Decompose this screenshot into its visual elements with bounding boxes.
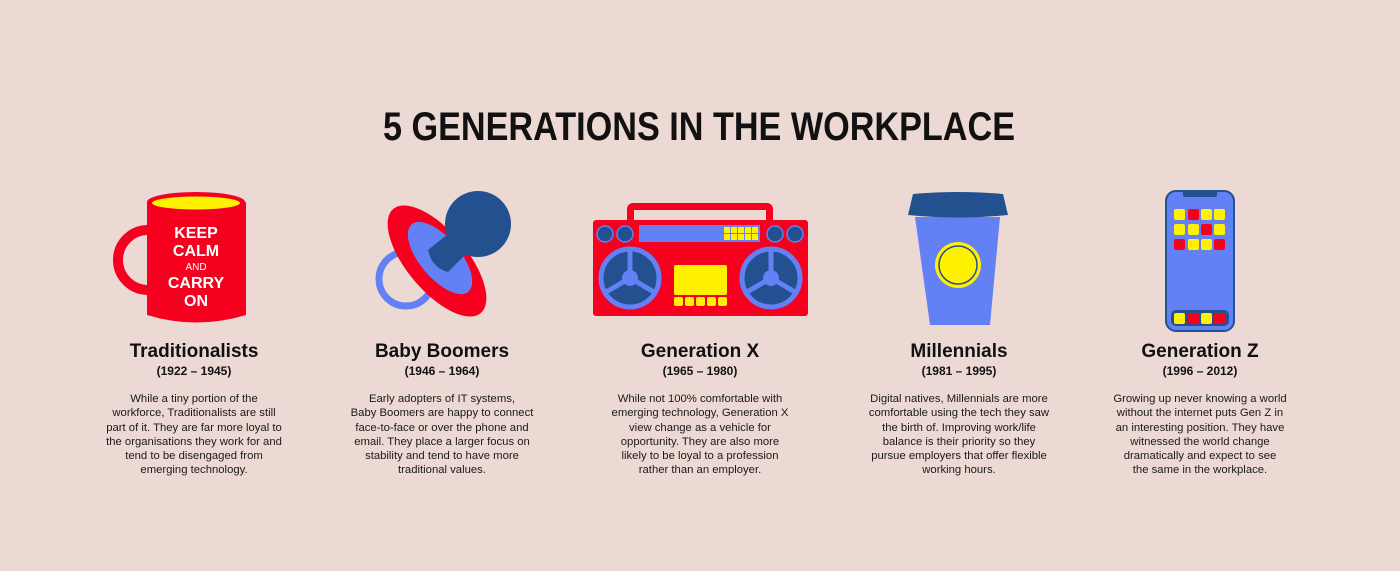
title: 5 GENERATIONS IN THE WORKPLACE (383, 105, 1015, 149)
text: generation z: (1996 – 2012) (1163, 364, 1237, 378)
text: baby boomers: face-to-face or over the phone and (355, 422, 529, 434)
icon: mug: KEEP (174, 225, 218, 242)
text: millennials: pursue employers that offer flexible (871, 450, 1047, 462)
text: generation z: Generation Z (1141, 341, 1259, 362)
text: generation x (612, 341, 788, 476)
text: generation z: witnessed the world change (1130, 436, 1270, 448)
text: baby boomers: stability and tend to have more (365, 450, 519, 462)
text: generation x: rather than an employer. (639, 464, 761, 476)
text: generation x: likely to be loyal to a profession (622, 450, 778, 462)
text: millennials: working hours. (922, 464, 996, 476)
text: traditionalists: (1922 – 1945) (157, 364, 231, 378)
text: generation x: (1965 – 1980) (663, 364, 737, 378)
text: generation x: emerging technology, Generation X (612, 407, 788, 419)
text: generation z (1113, 341, 1287, 476)
text: traditionalists: Traditionalists (130, 341, 258, 362)
text: generation z: without the internet puts Gen Z in (1117, 407, 1283, 419)
icon: mug: ON (184, 293, 208, 310)
text: millennials (869, 341, 1049, 476)
icon: mug: CALM (173, 243, 219, 260)
text: millennials: the birth of. Improving work/life (882, 422, 1036, 434)
text: traditionalists: tend to be disengaged from (125, 450, 263, 462)
icons (113, 190, 1235, 332)
text: traditionalists: the organisations they work for and (106, 436, 282, 448)
text: traditionalists: workforce, Traditionalists are still (112, 407, 276, 419)
text: baby boomers: email. They place a larger focus on (354, 436, 530, 448)
text: millennials: Millennials (910, 341, 1008, 362)
text: traditionalists: emerging technology. (140, 464, 248, 476)
icon: mug (118, 192, 246, 322)
text: generation x: While not 100% comfortable with (618, 393, 782, 405)
text: generation z: an interesting position. They have (1116, 422, 1284, 434)
text: generation z: the same in the workplace. (1133, 464, 1267, 476)
icon: mug: AND (185, 262, 207, 273)
icon: phone (1166, 191, 1234, 331)
icon: boombox (593, 203, 808, 316)
icon: coffee cup (908, 192, 1008, 325)
text: baby boomers: traditional values. (398, 464, 486, 476)
text: baby boomers: (1946 – 1964) (405, 364, 479, 378)
text: baby boomers: Baby Boomers are happy to connect (351, 407, 533, 419)
text: baby boomers: Baby Boomers (375, 341, 509, 362)
text: generation z: dramatically and expect to see (1124, 450, 1276, 462)
text: millennials: (1981 – 1995) (922, 364, 996, 378)
icon: mug: CARRY (168, 275, 224, 292)
text: generation z: Growing up never knowing a world (1113, 393, 1287, 405)
text: generation x: Generation X (641, 341, 759, 362)
text: traditionalists (106, 341, 282, 476)
text: millennials: balance is their priority so they (883, 436, 1035, 448)
text: generation x: opportunity. They are also more (621, 436, 779, 448)
text: baby boomers (351, 341, 534, 476)
text: traditionalists: part of it. They are far more loyal to (106, 422, 282, 434)
text: millennials: comfortable using the tech they saw (869, 407, 1049, 419)
icon: pacifier (370, 190, 511, 332)
text: traditionalists: While a tiny portion of the (130, 393, 258, 405)
text: baby boomers: Early adopters of IT systems, (369, 393, 515, 405)
text: millennials: Digital natives, Millennials are more (870, 393, 1048, 405)
text: generation x: view change as a vehicle for (629, 422, 771, 434)
